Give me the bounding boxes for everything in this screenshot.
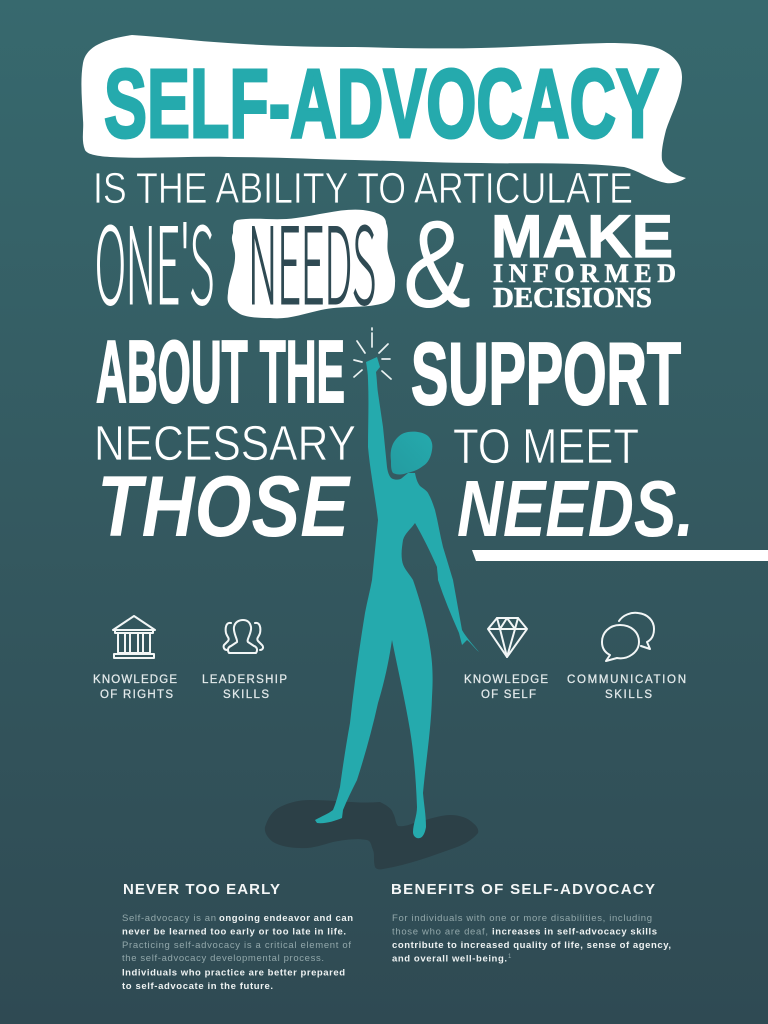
paragraph: benefits: contribute to increased quality of life, sense of agency, <box>392 940 671 951</box>
statement headline: NEEDS <box>248 182 376 333</box>
paragraph: never too early: Self-advocacy is an <box>122 913 216 924</box>
icon: speech bubbles <box>602 613 654 661</box>
label: communication skills: SKILLS <box>605 689 652 701</box>
heading: never too early: NEVER TOO EARLY <box>123 881 280 898</box>
text: necessary: NECESSARY <box>94 417 356 471</box>
figure shadow <box>265 800 478 869</box>
paragraph: never too early <box>122 913 353 992</box>
label: knowledge of rights: KNOWLEDGE <box>93 674 177 686</box>
person figure <box>315 328 479 838</box>
text: decisions: DECISIONS <box>493 282 652 314</box>
paragraph: benefits: those who are deaf, <box>392 926 488 938</box>
paragraph: never too early: ongoing endeavor and can <box>219 913 353 924</box>
paragraph: benefits <box>392 913 671 964</box>
paragraph: never too early: to self-advocate in the future. <box>122 981 273 992</box>
statement headline: ONE'S <box>95 182 214 333</box>
spark rays <box>354 328 391 379</box>
text block: never too early <box>122 881 353 992</box>
label: knowledge of rights: OF RIGHTS <box>100 689 173 701</box>
paragraph: benefits: For individuals with one or more disabilities, including <box>392 913 652 924</box>
head <box>391 432 432 474</box>
paragraph: benefits: 1 <box>508 954 512 960</box>
line: is the ability to articulate: IS THE ABILITY TO ARTICULATE <box>93 164 633 213</box>
paragraph: benefits: increases in self-advocacy skills <box>492 926 657 938</box>
label: communication skills <box>567 674 686 701</box>
heading: benefits of self-advocacy: BENEFITS OF SELF-ADVOCACY <box>391 881 655 898</box>
label: communication skills: COMMUNICATION <box>567 674 686 686</box>
icon: diamond <box>488 618 527 657</box>
text: informed: INFORMED <box>493 259 676 288</box>
statement headline <box>93 164 694 555</box>
icon: courthouse <box>113 616 155 658</box>
text block: benefits of self-advocacy <box>391 881 671 964</box>
body <box>315 357 479 838</box>
text: make: MAKE <box>491 203 673 270</box>
statement headline: ABOUT THE <box>96 322 345 421</box>
text: to meet: TO MEET <box>453 420 639 474</box>
bubble shape <box>81 35 686 183</box>
ampersand: & <box>403 196 471 334</box>
paragraph: never too early: the self-advocacy developmental process. <box>122 953 324 964</box>
label: leadership skills <box>202 674 287 701</box>
label: knowledge of self: KNOWLEDGE <box>464 674 548 686</box>
paragraph: never too early: never be learned too early or too late in life. <box>122 926 346 938</box>
icon: group of people <box>224 620 263 653</box>
label: knowledge of rights <box>93 674 177 701</box>
paragraph: never too early: Individuals who practice are better prepared <box>122 968 345 978</box>
underline bar <box>472 550 768 561</box>
text: those: THOSE <box>97 459 351 555</box>
label: leadership skills: SKILLS <box>223 689 269 701</box>
paragraph: never too early: Practicing self-advocacy is a critical element of <box>122 940 351 951</box>
paragraph: benefits: and overall well-being. <box>392 954 507 964</box>
label: knowledge of self <box>464 674 548 701</box>
label: knowledge of self: OF SELF <box>481 689 536 701</box>
title speech bubble <box>81 35 686 183</box>
label: leadership skills: LEADERSHIP <box>202 674 287 686</box>
needs white blob <box>228 210 395 318</box>
text: needs period: NEEDS. <box>457 464 694 553</box>
